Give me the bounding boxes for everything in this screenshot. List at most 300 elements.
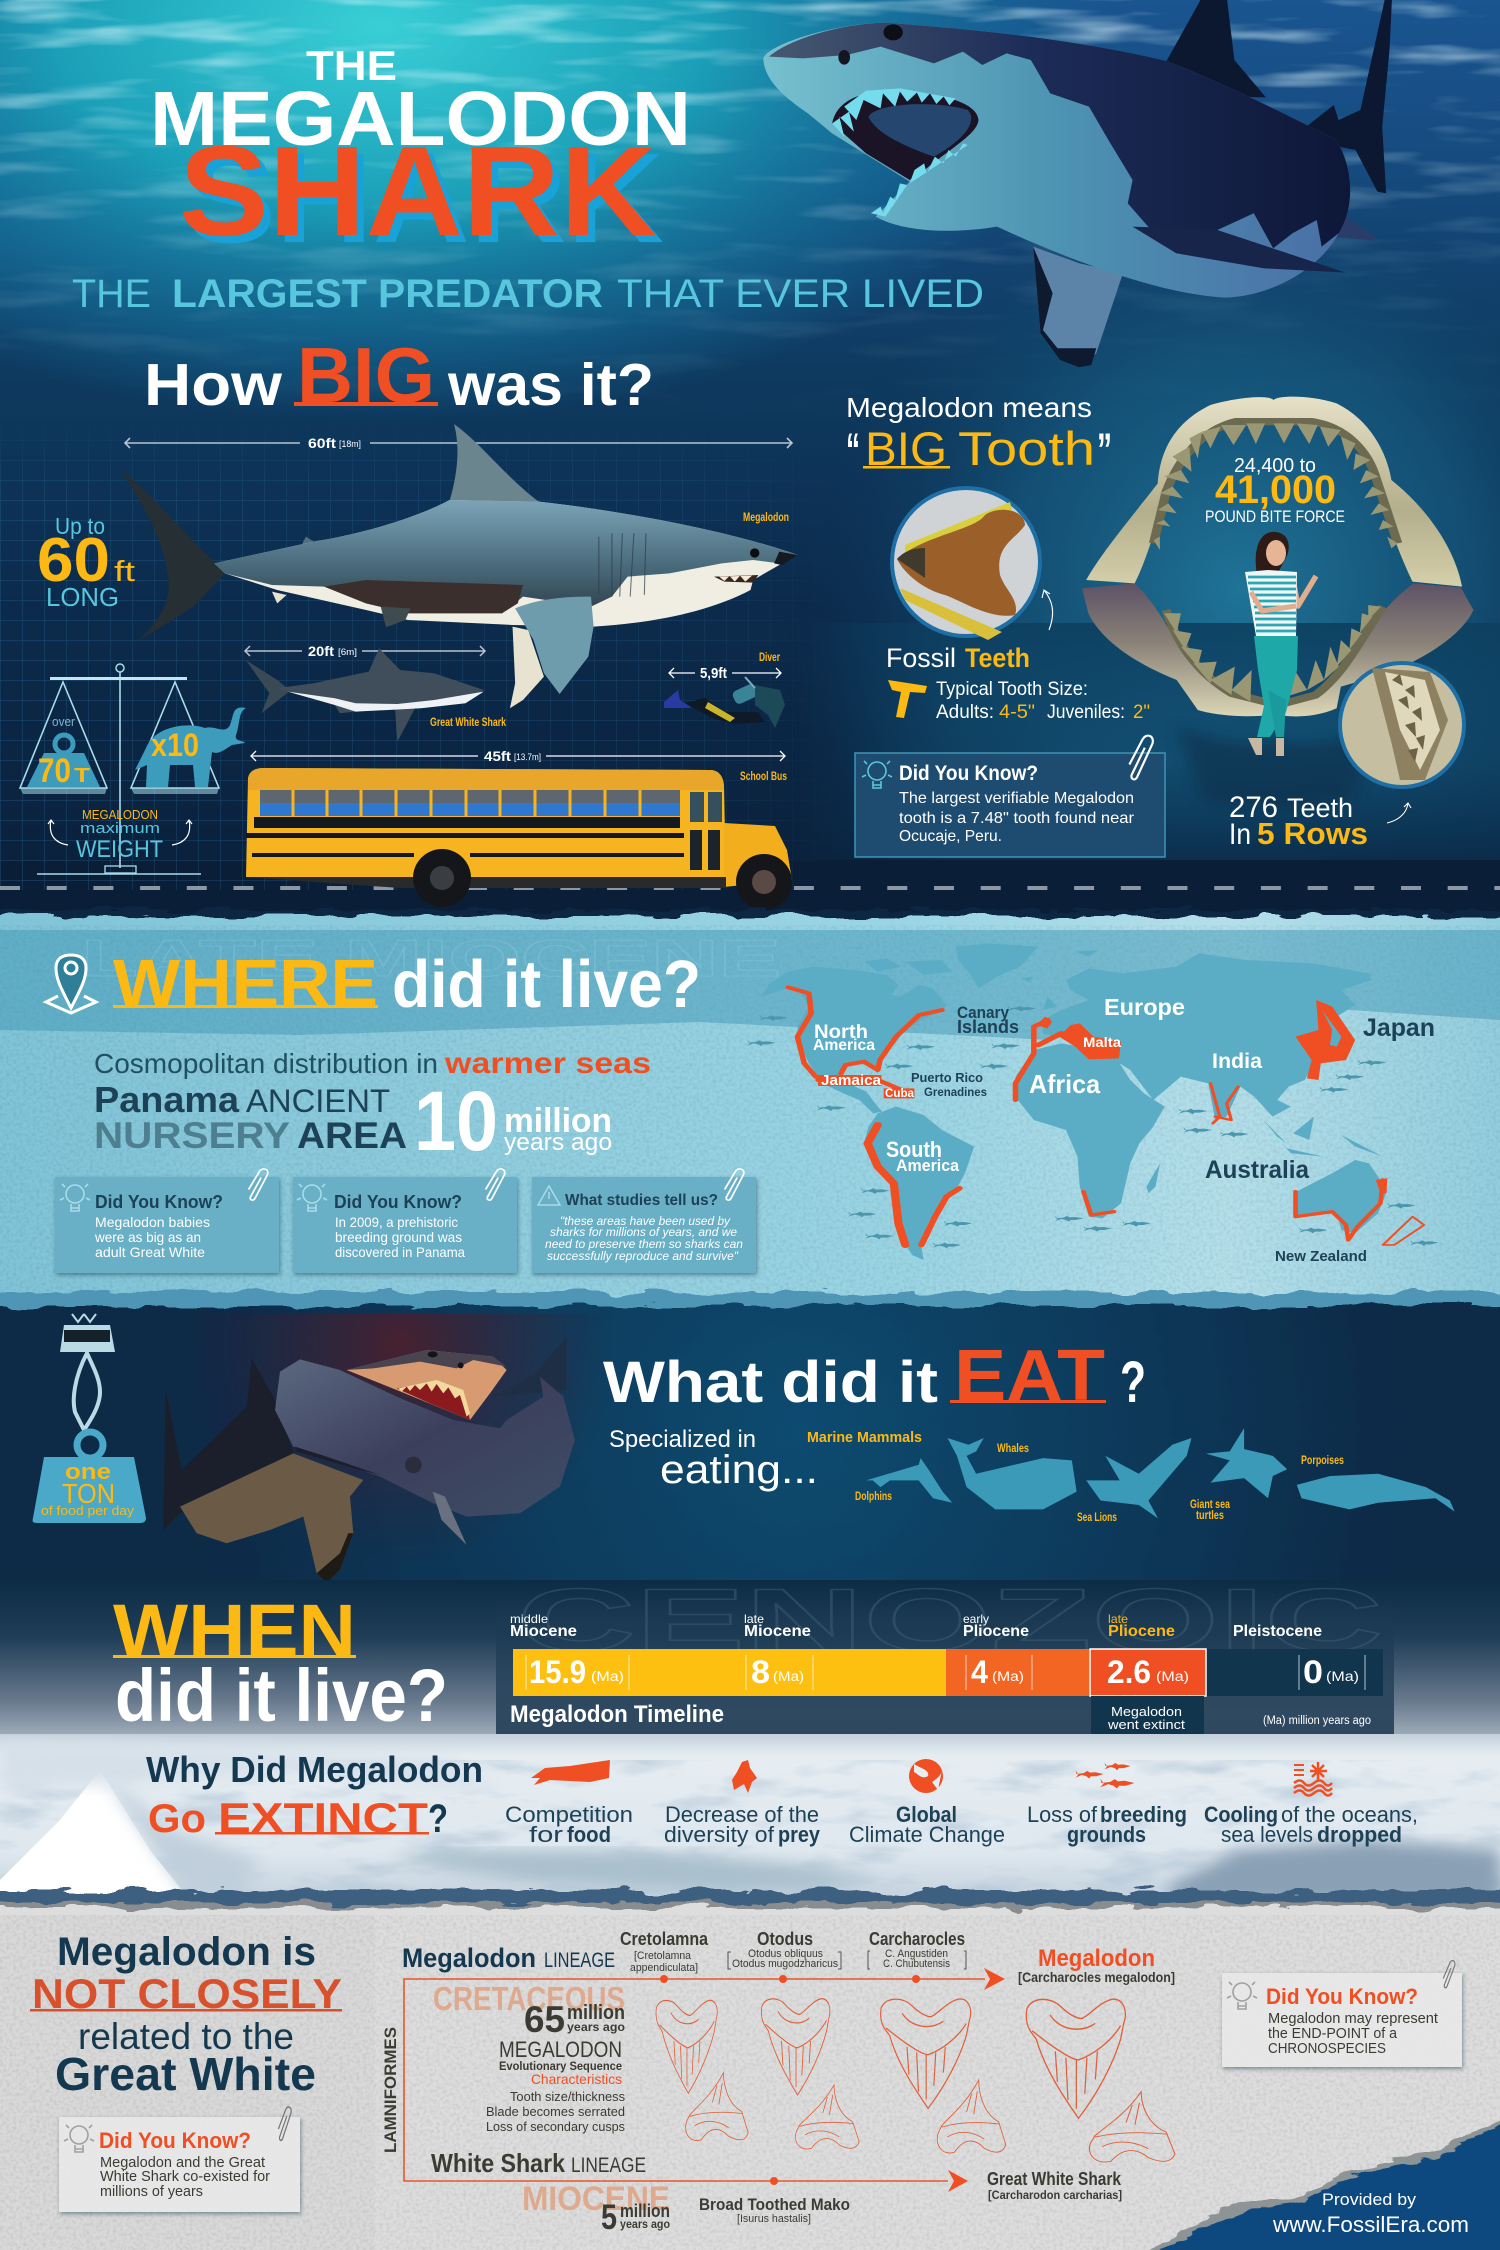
heading: how big was it: How <box>144 352 282 418</box>
icon: 70 ton weight: 70 <box>38 752 71 790</box>
period labels: early <box>963 1612 989 1626</box>
label: 276 teeth in 5 rows: 5 Rows <box>1257 816 1368 851</box>
text: typical tooth size <box>936 679 1150 723</box>
heading: when did it live <box>113 1589 448 1737</box>
heading: where did it live <box>113 946 701 1022</box>
illustration: scuba diver <box>664 677 785 728</box>
callout: what studies tell us: sharks for millions of years, and we <box>550 1225 737 1239</box>
subtitle <box>72 272 984 316</box>
labels: prey names: turtles <box>1196 1510 1224 1522</box>
callout: coexisted: White Shark co-existed for <box>100 2168 270 2185</box>
text: cretaceous 65 million: million <box>567 2002 625 2024</box>
causes text: prey <box>778 1822 821 1847</box>
stat: 10 million years ago <box>414 1074 612 1168</box>
callout: chronospecies: the END-POINT of a <box>1268 2025 1398 2042</box>
label: fossil teeth: Fossil <box>886 643 956 673</box>
icon: 70 ton weight: T <box>74 765 90 787</box>
callout: chronospecies: CHRONOSPECIES <box>1268 2040 1386 2057</box>
continents <box>761 943 1387 1260</box>
dimension line: 45ft: [13.7m] <box>514 752 541 762</box>
text: miocene 5 million: MIOCENE <box>522 2180 670 2218</box>
genus: megalodon: [Carcharocles megalodon] <box>1018 1969 1175 1985</box>
label: bite force <box>1205 455 1345 526</box>
period labels: Pleistocene <box>1233 1623 1322 1640</box>
stat: 10 million years ago: years ago <box>504 1129 612 1156</box>
callout: did you know largest tooth: Did You Know? <box>899 762 1038 785</box>
text: panama ancient nursery area <box>94 1079 407 1156</box>
causes text: sea levels <box>1221 1822 1313 1847</box>
labels: prey names <box>855 1443 1344 1524</box>
callout: megalodon babies: Megalodon babies <box>95 1214 210 1230</box>
causes text: of the oceans, <box>1281 1802 1418 1827</box>
label: 276 teeth in 5 rows: In <box>1229 818 1251 851</box>
label: up to 60ft long: ft <box>114 556 135 588</box>
label: up to 60ft long: Up to <box>55 513 105 539</box>
illustration: megalodon biting sperm whale <box>163 1337 575 1583</box>
labels: prey names: Porpoises <box>1301 1455 1344 1467</box>
period labels: Pliocene <box>1108 1623 1175 1640</box>
map labels: Puerto Rico <box>911 1070 983 1085</box>
heading: how big was it <box>144 331 654 419</box>
illustration: school bus <box>246 768 792 910</box>
icon: elephant x10 <box>135 707 246 787</box>
icon: location pin <box>46 955 96 1013</box>
dimension line: 60ft: [18m] <box>339 439 361 449</box>
map labels: Malta <box>1083 1034 1121 1050</box>
callout: did you know largest tooth: The largest verifiable Megalodon <box>899 790 1134 807</box>
label: lamniformes: LAMNIFORMES <box>381 2027 400 2153</box>
icon: whale <box>531 1760 610 1785</box>
map labels: Japan <box>1363 1014 1435 1042</box>
lineage heading: megalodon: LINEAGE <box>544 1949 615 1972</box>
period labels: Pliocene <box>963 1623 1029 1640</box>
icons: prey silhouettes <box>866 1428 1455 1518</box>
heading: why did megalodon go extinct: EXTINCT <box>218 1794 428 1841</box>
map labels: Europe <box>1104 994 1185 1020</box>
callout: megalodon babies: were as big as an <box>94 1229 201 1245</box>
stat: 10 million years ago: 10 <box>414 1074 498 1168</box>
label: broad toothed mako: Broad Toothed Mako <box>699 2195 850 2214</box>
map labels: Africa <box>1029 1069 1101 1099</box>
labels: prey names: Dolphins <box>855 1491 892 1503</box>
labels: prey names: Whales <box>997 1443 1029 1455</box>
genus: otodus <box>728 1929 841 1970</box>
callout: breeding ground: Did You Know? <box>334 1192 462 1212</box>
map labels <box>813 994 1435 1265</box>
lineage arrows <box>404 1968 1005 2192</box>
callout: breeding ground: discovered in Panama <box>335 1244 465 1260</box>
timeline values <box>526 1654 1365 1690</box>
text: miocene 5 million: 5 <box>601 2198 617 2237</box>
lineage heading: white shark <box>431 2148 646 2178</box>
text: evolutionary characteristics: Loss of secondary cusps <box>486 2120 625 2134</box>
label: megalodon maximum weight: maximum <box>80 820 160 837</box>
panel: lineage <box>0 1890 1500 2250</box>
callout: what studies tell us: successfully reproduce and survive" <box>547 1249 739 1263</box>
lineage heading: white shark: White Shark <box>431 2148 565 2178</box>
callout: chronospecies: Megalodon may represent <box>1268 2010 1439 2027</box>
causes text: Decrease of the <box>665 1802 819 1827</box>
label: megalodon maximum weight: WEIGHT <box>76 836 163 863</box>
heading: megalodon means big tooth: ” <box>1097 423 1112 476</box>
genus: otodus: Otodus <box>757 1929 813 1949</box>
heading: what did it eat: ? <box>1120 1350 1146 1415</box>
heading: not closely related: related to the <box>78 2016 294 2057</box>
map labels: Grenadines <box>924 1085 987 1099</box>
timeline bar <box>513 1649 1383 1696</box>
pennant: megalodon went extinct: Megalodon <box>1111 1704 1182 1719</box>
text: cretaceous 65 million: CRETACEOUS <box>433 1980 625 2017</box>
text: cosmopolitan distribution <box>94 1047 651 1080</box>
label: megalodon timeline: Megalodon Timeline <box>510 1701 724 1728</box>
heading: what did it eat: EAT <box>954 1336 1105 1416</box>
title: SHARK <box>186 127 664 270</box>
dimension line: 20ft: [6m] <box>338 647 357 657</box>
illustration: road dashes <box>0 886 1500 890</box>
heading: megalodon means big tooth: “ <box>846 423 860 476</box>
genus: carcharocles: C. Chubutensis <box>883 1958 950 1970</box>
label: up to 60ft long: LONG <box>46 582 119 612</box>
causes text: Competition <box>505 1802 633 1827</box>
causes text: grounds <box>1067 1822 1146 1847</box>
icon: 70 ton weight <box>27 714 100 790</box>
timeline values: 4 <box>971 1654 988 1690</box>
icon: one ton weight: TON <box>62 1478 115 1509</box>
label: 276 teeth in 5 rows: Teeth <box>1287 793 1353 823</box>
callout: did you know largest tooth: Ocucaje, Peru. <box>899 828 1002 845</box>
icon: one ton weight <box>32 1432 146 1523</box>
period labels: middle <box>510 1612 548 1626</box>
map labels: America <box>896 1156 959 1175</box>
illustration: attacking megalodon shark <box>763 0 1392 367</box>
causes text: dropped <box>1317 1822 1402 1847</box>
label: 276 teeth in 5 rows: 276 <box>1229 791 1278 824</box>
text: typical tooth size: 4-5" <box>999 702 1035 723</box>
text: panama ancient nursery area: ANCIENT <box>246 1083 390 1119</box>
red glow <box>180 1314 610 1604</box>
label: broad toothed mako <box>699 2195 850 2225</box>
stat: 10 million years ago: million <box>504 1102 612 1140</box>
panel: when did it live <box>0 1570 1500 1746</box>
period labels: late <box>1108 1612 1128 1626</box>
timeline panel <box>496 1570 1394 1746</box>
subtitle: THAT EVER LIVED <box>617 272 984 316</box>
causes text: diversity of <box>664 1822 775 1847</box>
sharks <box>747 1006 1439 1248</box>
credit: provided by: www.FossilEra.com <box>1272 2212 1469 2237</box>
labels: prey names: Sea Lions <box>1077 1512 1117 1524</box>
timeline values: (Ma) <box>1156 1668 1189 1684</box>
text: typical tooth size: 2" <box>1133 702 1150 723</box>
label: 276 teeth in 5 rows <box>1229 791 1411 851</box>
ghost text: cenozoic: CENOZOIC <box>517 1570 1383 1669</box>
text: specialized in eating: eating... <box>660 1448 818 1492</box>
map labels: New Zealand <box>1275 1248 1367 1265</box>
genus: carcharocles: Carcharocles <box>869 1929 965 1949</box>
heading: not closely related <box>30 1930 342 2100</box>
heading: why did megalodon go extinct: Why Did Megalodon <box>146 1749 483 1790</box>
label: bite force: POUND BITE FORCE <box>1205 507 1345 526</box>
timeline values: 0 <box>1303 1654 1323 1690</box>
icon: one ton weight: one <box>65 1459 111 1484</box>
causes text: Cooling <box>1204 1802 1278 1827</box>
genus: carcharocles: C. Angustiden <box>885 1948 948 1960</box>
illustrations: tooth evolution <box>656 1999 1175 2162</box>
causes text <box>505 1802 1418 1847</box>
causes text: Global <box>896 1802 957 1827</box>
genus: otodus: Otodus mugodzharicus <box>732 1958 838 1970</box>
timeline values: 8 <box>751 1654 770 1690</box>
heading: why did megalodon go extinct: ? <box>428 1797 448 1841</box>
label: marine mammals: Marine Mammals <box>807 1429 922 1446</box>
text: typical tooth size: Typical Tooth Size: <box>936 679 1088 700</box>
habitat coastlines <box>788 987 1424 1245</box>
ice background <box>0 1734 1500 1914</box>
map labels: India <box>1212 1050 1262 1073</box>
title: SHARK <box>179 120 657 263</box>
heading: how big was it: BIG <box>297 331 435 419</box>
map labels: South <box>886 1137 942 1162</box>
timeline values: (Ma) <box>773 1668 804 1684</box>
icon: 70 ton weight: over <box>52 714 76 729</box>
text: evolutionary characteristics: Characteristics <box>531 2071 622 2087</box>
map labels: America <box>813 1037 875 1054</box>
label: megalodon maximum weight: MEGALODON <box>82 807 158 822</box>
icon: globe <box>909 1759 943 1793</box>
heading: when did it live: WHEN <box>113 1589 356 1672</box>
heading: not closely related: Great White <box>55 2048 316 2100</box>
text: miocene 5 million <box>522 2180 670 2237</box>
credit: provided by <box>1272 2190 1469 2237</box>
label: great white shark species <box>987 2169 1122 2202</box>
illustration: great white shark <box>246 648 484 742</box>
text: panama ancient nursery area: Panama <box>94 1079 240 1120</box>
callout: coexisted: millions of years <box>100 2183 203 2200</box>
map labels: Australia <box>1205 1156 1310 1184</box>
timeline values: 15.9 <box>529 1654 586 1690</box>
text: evolutionary characteristics: Tooth size/thickness <box>510 2090 625 2104</box>
callout: breeding ground: In 2009, a prehistoric <box>335 1214 458 1230</box>
label: up to 60ft long: 60 <box>37 526 110 595</box>
callout: breeding ground: breeding ground was <box>335 1229 462 1245</box>
arrow: tooth pointer <box>1042 590 1053 630</box>
icon: fish <box>1076 1763 1134 1788</box>
icon: hanging scale <box>60 1314 115 1430</box>
text: typical tooth size: Adults: <box>936 702 994 723</box>
text: miocene 5 million: years ago <box>620 2217 670 2231</box>
ocean corner <box>1060 2095 1500 2250</box>
heading: not closely related: Megalodon is <box>57 1930 316 1974</box>
illustration: woman inside jaws <box>1245 532 1316 756</box>
panel: why did megalodon go extinct <box>0 1734 1500 1914</box>
callout: chronospecies: Did You Know? <box>1266 1984 1418 2009</box>
label: fossil teeth: Teeth <box>965 643 1030 673</box>
panel: where did it live <box>0 910 1500 1308</box>
callout: did you know largest tooth: tooth is a 7.48" tooth found near <box>899 810 1135 827</box>
text: cosmopolitan distribution: warmer seas <box>444 1047 651 1080</box>
text: cretaceous 65 million: 65 <box>524 1999 565 2040</box>
heading: what did it eat <box>603 1336 1146 1416</box>
genus: otodus: Otodus obliquus <box>748 1948 823 1960</box>
dimension line: 20ft: 20ft <box>308 643 334 659</box>
icon: hammer ruler <box>888 680 927 718</box>
ocean background <box>0 0 1500 930</box>
label: broad toothed mako: [Isurus hastalis] <box>737 2213 811 2225</box>
genus: megalodon: Megalodon <box>1038 1945 1155 1972</box>
causes text: for <box>529 1822 563 1847</box>
texture and header band <box>0 925 1500 1295</box>
subtitle: THE <box>72 272 151 316</box>
heading: megalodon means big tooth: Megalodon means <box>846 392 1092 423</box>
label: school bus: School Bus <box>740 769 787 783</box>
labels: prey names: Giant sea <box>1190 1499 1230 1511</box>
timeline values: (Ma) <box>591 1668 624 1684</box>
world map <box>747 943 1439 1260</box>
label: great white shark species: [Carcharodon carcharias] <box>988 2188 1122 2202</box>
label: great white shark: Great White Shark <box>430 715 506 729</box>
illustration: megalodon side view <box>119 424 798 708</box>
callout: megalodon babies: adult Great White <box>95 1244 205 1260</box>
heading: why did megalodon go extinct: Go <box>148 1797 206 1841</box>
label: megalodon: Megalodon <box>743 510 789 524</box>
heading: what did it eat: What did it <box>603 1350 938 1415</box>
icon: one ton weight: of food per day <box>41 1503 135 1518</box>
heading: megalodon means big tooth <box>846 392 1112 476</box>
photo: fossil tooth <box>892 488 1040 640</box>
timeline values: 2.6 <box>1107 1654 1151 1690</box>
dimension line: diver: 5,9ft <box>700 665 727 682</box>
title <box>150 42 691 270</box>
background gradient <box>0 1580 1500 1740</box>
text: panama ancient nursery area: NURSERY <box>94 1115 290 1156</box>
heading: megalodon means big tooth: Tooth <box>958 422 1095 475</box>
heading: when did it live: did it live? <box>115 1654 448 1737</box>
illustration: balance scale <box>20 664 219 874</box>
heading: not closely related: NOT CLOSELY <box>32 1970 342 2017</box>
period labels <box>510 1612 1322 1640</box>
text: evolutionary characteristics <box>486 2037 625 2134</box>
genus: cretolamna: appendiculata] <box>630 1962 698 1974</box>
genus: carcharocles <box>868 1929 966 1970</box>
panel: what did it eat <box>0 1292 1500 1604</box>
map labels: North <box>814 1022 868 1043</box>
note: million years ago: (Ma) million years ago <box>1263 1715 1371 1727</box>
text: specialized in eating: Specialized in <box>609 1426 756 1453</box>
callout: what studies tell us: "these areas have been used by <box>560 1214 731 1228</box>
causes text: Loss of <box>1027 1802 1098 1827</box>
dimension line: 60ft <box>125 435 792 451</box>
map labels: Jamaica <box>821 1072 882 1089</box>
callout: breeding ground <box>293 1169 517 1273</box>
label: bite force: 41,000 <box>1215 468 1336 512</box>
icon: cooling waves <box>1294 1762 1332 1796</box>
label: up to 60ft long <box>37 513 135 612</box>
dimension line: 45ft <box>251 748 785 764</box>
callout: did you know largest tooth <box>855 736 1165 857</box>
lineage heading: megalodon: Megalodon <box>402 1943 536 1973</box>
timeline values: (Ma) <box>1326 1668 1359 1684</box>
causes text: breeding <box>1100 1802 1187 1827</box>
credit: provided by: Provided by <box>1322 2190 1417 2209</box>
lineage heading: megalodon <box>402 1943 615 1973</box>
photo: rows of teeth <box>1340 663 1464 787</box>
subtitle: LARGEST PREDATOR <box>172 272 603 316</box>
callout: megalodon babies <box>55 1169 279 1273</box>
label: great white shark species: Great White Shark <box>987 2169 1122 2189</box>
text: evolutionary characteristics: Evolutionary Sequence <box>499 2059 622 2073</box>
text: cretaceous 65 million: years ago <box>567 2020 625 2034</box>
dark background with torn edge <box>0 1292 1500 1602</box>
pennant: megalodon went extinct <box>1091 1696 1204 1746</box>
paper texture <box>0 1915 1500 2250</box>
label: diver: Diver <box>759 650 780 664</box>
heading: where did it live: did it live? <box>392 947 701 1022</box>
map labels: Canary <box>957 1003 1009 1022</box>
timeline values: (Ma) <box>992 1668 1024 1684</box>
label: megalodon maximum weight <box>48 807 192 863</box>
genus: cretolamna: [Cretolamna <box>634 1950 692 1962</box>
title: MEGALODON <box>150 76 691 162</box>
label: bite force: 24,400 to <box>1234 455 1316 477</box>
panel: ocean hero and size comparison <box>0 0 1500 930</box>
callout: coexisted: Did You Know? <box>99 2128 251 2153</box>
map labels: Cuba <box>885 1086 914 1100</box>
torn paper background <box>0 910 1500 1308</box>
genus: cretolamna <box>620 1929 709 1974</box>
ghost text: late miocene: LATE MIOCENE <box>81 930 781 988</box>
period labels: Miocene <box>744 1623 811 1640</box>
pennant: megalodon went extinct: went extinct <box>1107 1717 1185 1732</box>
callout: what studies tell us: What studies tell us? <box>565 1192 718 1209</box>
text: panama ancient nursery area: AREA <box>297 1115 407 1156</box>
callout: what studies tell us: need to preserve them so sharks can <box>545 1237 743 1251</box>
icon: elephant x10: x10 <box>151 727 199 763</box>
causes text: food <box>567 1822 611 1847</box>
text: specialized in eating <box>609 1426 818 1492</box>
genus: megalodon <box>1018 1945 1175 1985</box>
text: miocene 5 million: million <box>620 2201 670 2221</box>
title: THE <box>306 42 397 89</box>
causes text: Climate Change <box>849 1822 1005 1847</box>
dimension line: diver <box>669 665 781 682</box>
callout: coexisted: Megalodon and the Great <box>100 2154 266 2171</box>
lineage heading: white shark: LINEAGE <box>571 2154 646 2177</box>
heading: how big was it: was it? <box>447 352 654 418</box>
dimension line: 45ft: 45ft <box>484 748 511 764</box>
label: fossil teeth <box>886 643 1030 673</box>
text: evolutionary characteristics: Blade becomes serrated <box>486 2105 625 2119</box>
callout: coexisted <box>59 2107 300 2212</box>
paper background <box>0 1890 1500 2250</box>
icon: turtle <box>732 1760 757 1793</box>
callout: megalodon babies: Did You Know? <box>95 1192 223 1212</box>
dimension line: 20ft <box>245 643 485 659</box>
genus: cretolamna: Cretolamna <box>620 1929 709 1949</box>
text: cosmopolitan distribution: Cosmopolitan distribution in <box>94 1048 438 1079</box>
dimension line: 60ft: 60ft <box>308 435 336 451</box>
callout: what studies tell us <box>532 1169 756 1273</box>
callout: chronospecies <box>1222 1961 1462 2067</box>
period labels: late <box>744 1612 764 1626</box>
heading: where did it live: WHERE <box>113 946 378 1021</box>
text: evolutionary characteristics: MEGALODON <box>499 2037 622 2062</box>
period labels: Miocene <box>510 1623 577 1640</box>
heading: why did megalodon go extinct <box>146 1749 483 1841</box>
illustration: shark jaws <box>1082 397 1473 810</box>
text: cretaceous 65 million <box>433 1980 625 2040</box>
heading: megalodon means big tooth: BIG <box>865 422 947 475</box>
map labels: Islands <box>957 1017 1019 1037</box>
